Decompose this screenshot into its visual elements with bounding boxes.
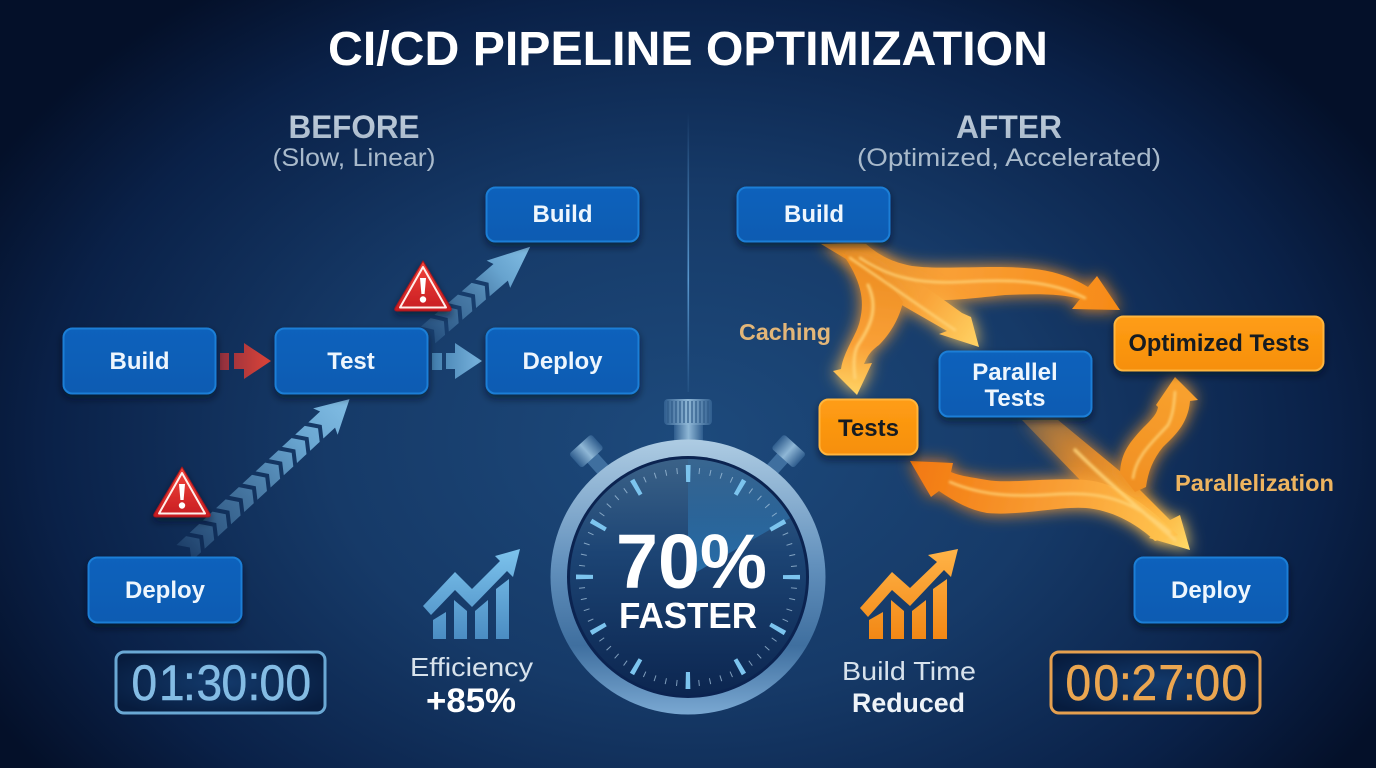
node: deploy (after): Deploy [1171, 577, 1252, 604]
after title: AFTER [956, 109, 1062, 145]
arrow: parallel tests to deploy [1022, 420, 1190, 550]
node: build (before top) [486, 188, 638, 242]
node: tests (orange): Tests [838, 415, 899, 442]
title: CI/CD PIPELINE OPTIMIZATION [328, 23, 1048, 76]
node: tests (orange) [820, 400, 918, 454]
before subtitle: (Slow, Linear) [272, 144, 436, 172]
panel: after pipeline flow arrows [821, 244, 1198, 550]
arrow: build to test (red) [220, 343, 271, 379]
node: deploy (before bottom) [88, 558, 242, 622]
icon: efficiency chart [423, 549, 520, 639]
icon: build time chart [860, 549, 958, 639]
node: build (after) [738, 188, 890, 242]
arrow: build to optimized tests [828, 244, 1120, 310]
timer: after: 00:27:00 [1066, 656, 1247, 711]
panel: before pipeline arrows [172, 233, 542, 566]
stat: build time [842, 656, 976, 718]
label: parallelization: Parallelization [1175, 470, 1334, 496]
arrow: deploy to test [172, 386, 362, 566]
icon: warning upper [395, 261, 451, 311]
stopwatch highlighted wedge [688, 459, 790, 577]
stopwatch caption: FASTER [619, 595, 757, 636]
arrow: to tests (return) [910, 461, 1178, 541]
stopwatch left button [569, 434, 616, 482]
node: deploy (before bottom): Deploy [125, 577, 206, 604]
stopwatch face [567, 456, 809, 698]
before title: BEFORE [288, 109, 420, 145]
build time label: Build Time [842, 656, 976, 686]
efficiency label: Efficiency [410, 652, 533, 682]
node: parallel tests: Parallel [972, 359, 1058, 386]
stopwatch minor ticks [582, 470, 794, 684]
icon: warning lower [154, 467, 210, 517]
node: deploy (before right): Deploy [522, 348, 603, 375]
node: build (before left): Build [110, 348, 170, 375]
heading: after [857, 109, 1161, 172]
stopwatch major ticks [584, 474, 792, 680]
stopwatch bezel [550, 440, 826, 714]
build time value: Reduced [852, 688, 965, 718]
arrow highlights [850, 258, 1175, 540]
after subtitle: (Optimized, Accelerated) [857, 144, 1161, 172]
node: deploy (after) [1134, 558, 1288, 622]
arrow: build to tests [833, 253, 903, 395]
stopwatch crown [664, 399, 712, 442]
stopwatch right button [759, 434, 806, 482]
node: build (before top): Build [532, 201, 592, 228]
node: build (after): Build [784, 201, 844, 228]
node: test (before) [276, 328, 428, 394]
stopwatch [550, 399, 826, 714]
node: build (before left) [64, 328, 216, 394]
node: optimized tests [1114, 316, 1324, 370]
node: test (before): Test [327, 348, 375, 375]
center divider [688, 112, 689, 392]
node: deploy (before right) [486, 328, 638, 394]
heading: before [272, 109, 436, 172]
stopwatch value: 70% [616, 519, 767, 605]
node: optimized tests: Optimized Tests [1128, 330, 1310, 357]
efficiency value: +85% [426, 682, 516, 720]
arrow: test to build [416, 233, 542, 349]
node: parallel tests [940, 352, 1092, 416]
timer: before: 01:30:00 [131, 656, 311, 711]
arrow: build to parallel tests [821, 244, 979, 347]
stat: efficiency [410, 652, 533, 720]
arrow: test to deploy [432, 343, 482, 379]
arrow: to optimized tests (up) [1120, 377, 1198, 492]
node: parallel tests: Tests [985, 385, 1045, 412]
label: caching: Caching [739, 319, 831, 345]
